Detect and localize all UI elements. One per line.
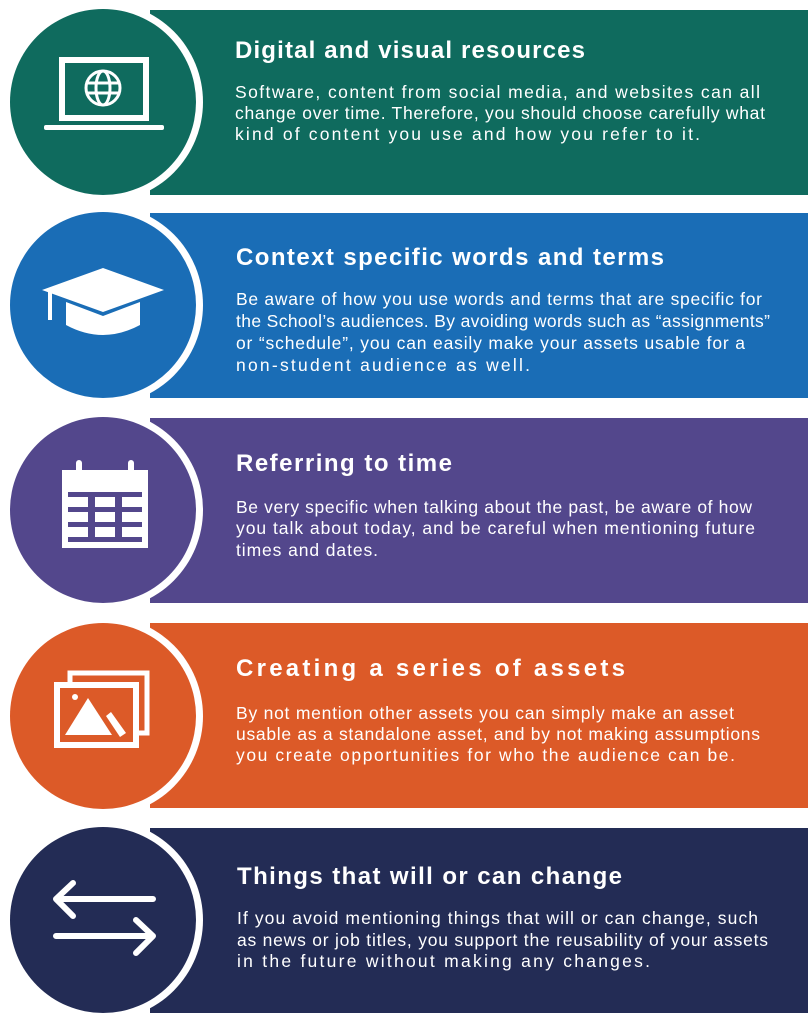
heading: Digital and visual resources: [235, 37, 585, 64]
text block: Be very specific when talking about the past, be aware of how: [236, 497, 752, 517]
text block: or “schedule”, you can easily make your assets usable for a: [236, 333, 745, 353]
heading: Things that will or can change: [237, 863, 622, 890]
icon: graduation cap: [42, 268, 164, 335]
panel: referring to time: [3, 410, 808, 610]
text block: Software, content from social media, and websites can all: [235, 82, 760, 102]
text block: kind of content you use and how you refer to it.: [235, 124, 700, 144]
text block: By not mention other assets you can simply make an asset: [236, 703, 734, 723]
text block: If you avoid mentioning things that will or can change, such: [237, 908, 758, 928]
text block: non-student audience as well.: [236, 355, 530, 375]
text block: times and dates.: [236, 540, 378, 560]
text block: you talk about today, and be careful when mentioning future: [236, 518, 755, 538]
heading: Creating a series of assets: [236, 655, 625, 682]
panel: digital and visual resources: [3, 2, 808, 202]
text block: the School’s audiences. By avoiding words such as “assignments”: [236, 311, 770, 331]
icon: calendar: [62, 460, 148, 548]
panel: things that will or can change: [3, 820, 808, 1020]
text block: as news or job titles, you support the reusability of your assets: [237, 930, 768, 950]
text block: usable as a standalone asset, and by not making assumptions: [236, 724, 760, 744]
text block: you create opportunities for who the audience can be.: [236, 745, 735, 765]
text block: change over time. Therefore, you should choose carefully what: [235, 103, 765, 123]
icon: swap arrows: [56, 883, 153, 953]
heading: Context specific words and terms: [236, 244, 664, 271]
icon: laptop with globe: [44, 60, 164, 130]
panel: context specific words: [3, 205, 808, 405]
panel: creating a series of assets: [3, 616, 808, 816]
text block: in the future without making any changes.: [237, 951, 650, 971]
text block: Be aware of how you use words and terms that are specific for: [236, 289, 762, 309]
heading: Referring to time: [236, 450, 452, 477]
icon: images: [57, 673, 147, 745]
